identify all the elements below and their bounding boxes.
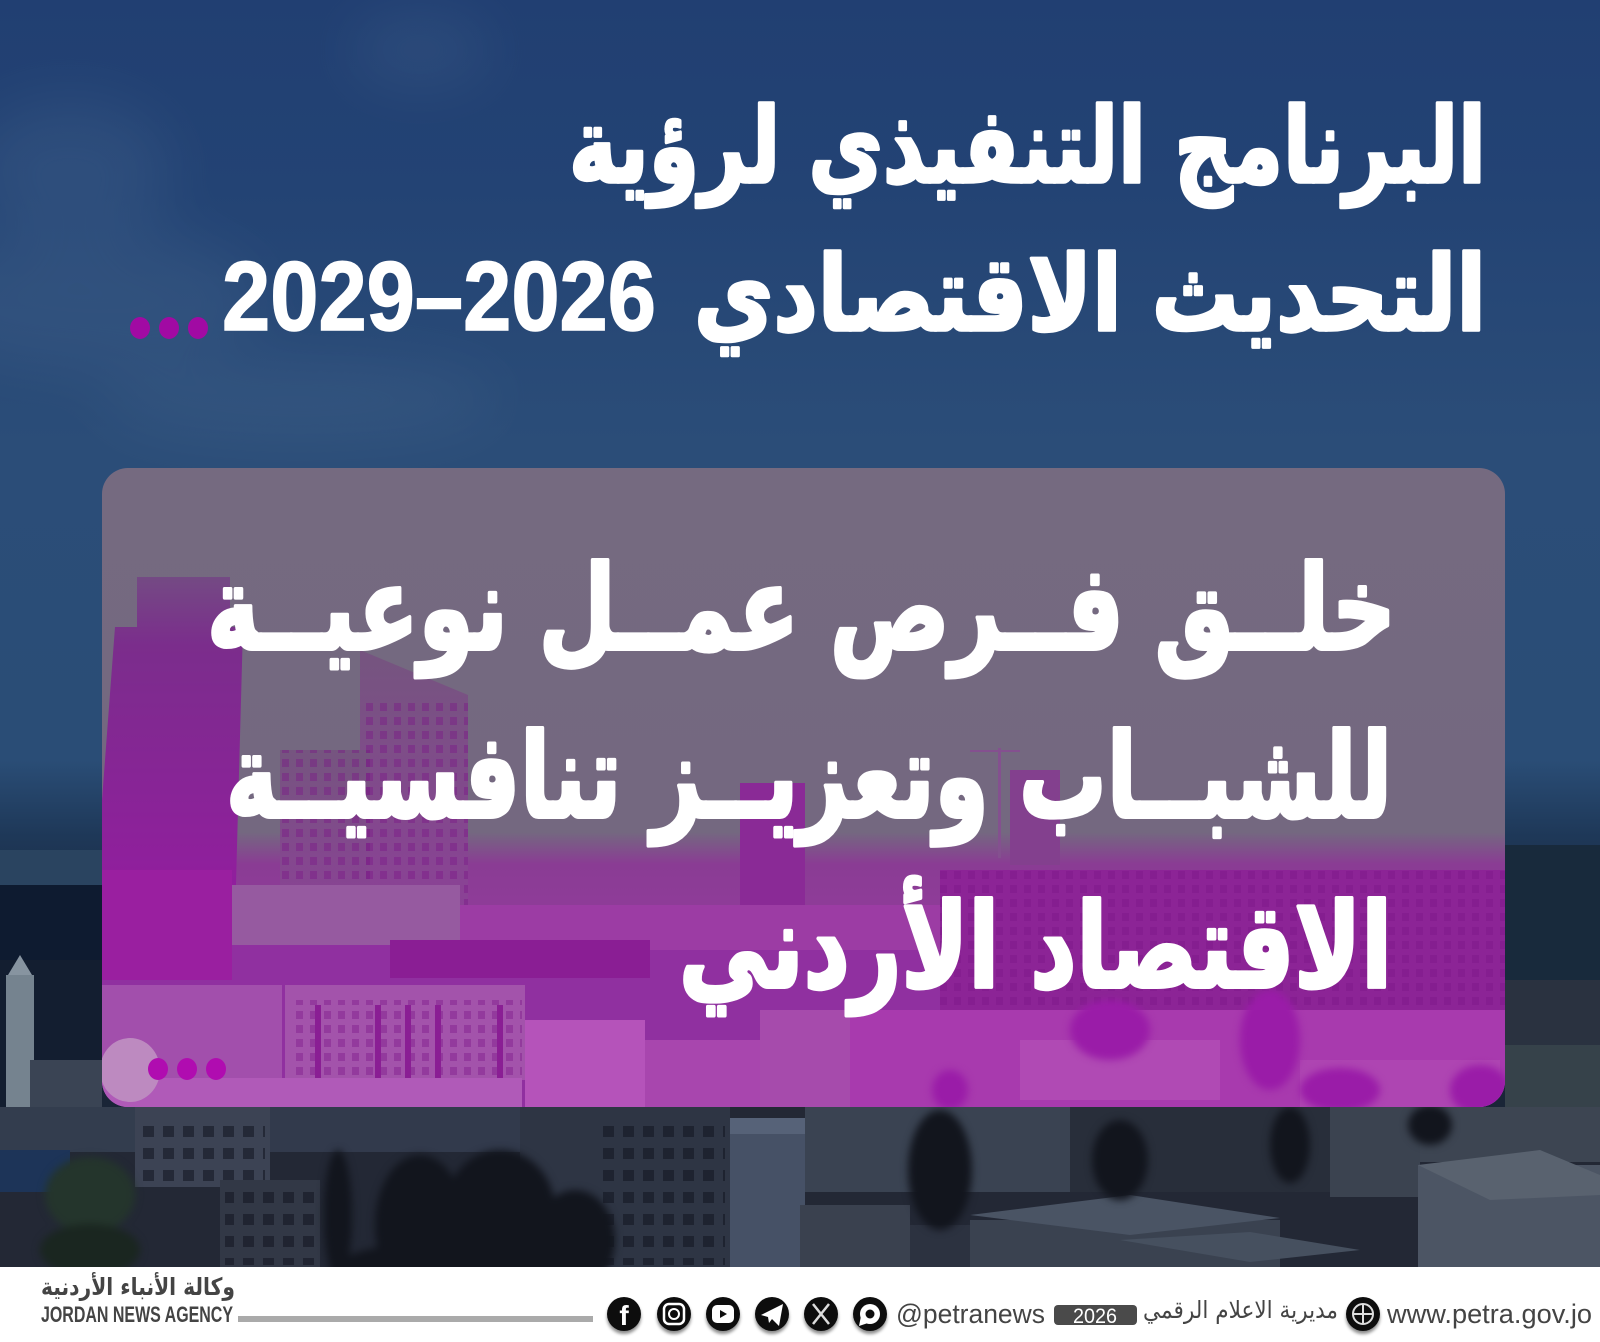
agency name english: JORDAN NEWS AGENCY (41, 1302, 233, 1327)
duotone city inside panel (100, 577, 1510, 1115)
icon: youtube (706, 1297, 740, 1331)
icon: x (804, 1297, 838, 1331)
icon: facebook (607, 1297, 641, 1331)
panel: purple overlay with headline (100, 468, 1510, 1115)
icon: whatsapp (853, 1297, 887, 1331)
website: www.petra.gov.jo (1386, 1299, 1592, 1329)
icon: telegram (755, 1297, 789, 1331)
year badge (1054, 1305, 1137, 1328)
panel ellipsis dots (148, 1058, 226, 1080)
icon: instagram (657, 1297, 691, 1331)
footer rule (238, 1316, 593, 1322)
agency name arabic: وكالة الأنباء الأردنية (41, 1272, 235, 1301)
lower city below the panel (0, 1105, 1600, 1295)
headline text (207, 540, 1396, 1016)
social handle: @petranews (896, 1299, 1045, 1329)
dark trees (40, 1105, 1452, 1295)
agency logo text (41, 1272, 235, 1327)
year badge: 2026 (1073, 1305, 1117, 1328)
right edge of city (1505, 845, 1600, 1110)
title years: 2029–2026 (222, 241, 656, 351)
icon: facebook: f (619, 1300, 629, 1331)
clouds (0, 15, 500, 440)
title ellipsis dots (130, 317, 208, 339)
footer bar (0, 1267, 1600, 1342)
left edge of city (0, 850, 102, 1110)
headline line 3: الاقتصاد الأردني (679, 876, 1392, 1016)
department name: مديرية الاعلام الرقمي (1143, 1296, 1338, 1324)
icon: globe (1346, 1297, 1380, 1331)
title (130, 85, 1486, 355)
